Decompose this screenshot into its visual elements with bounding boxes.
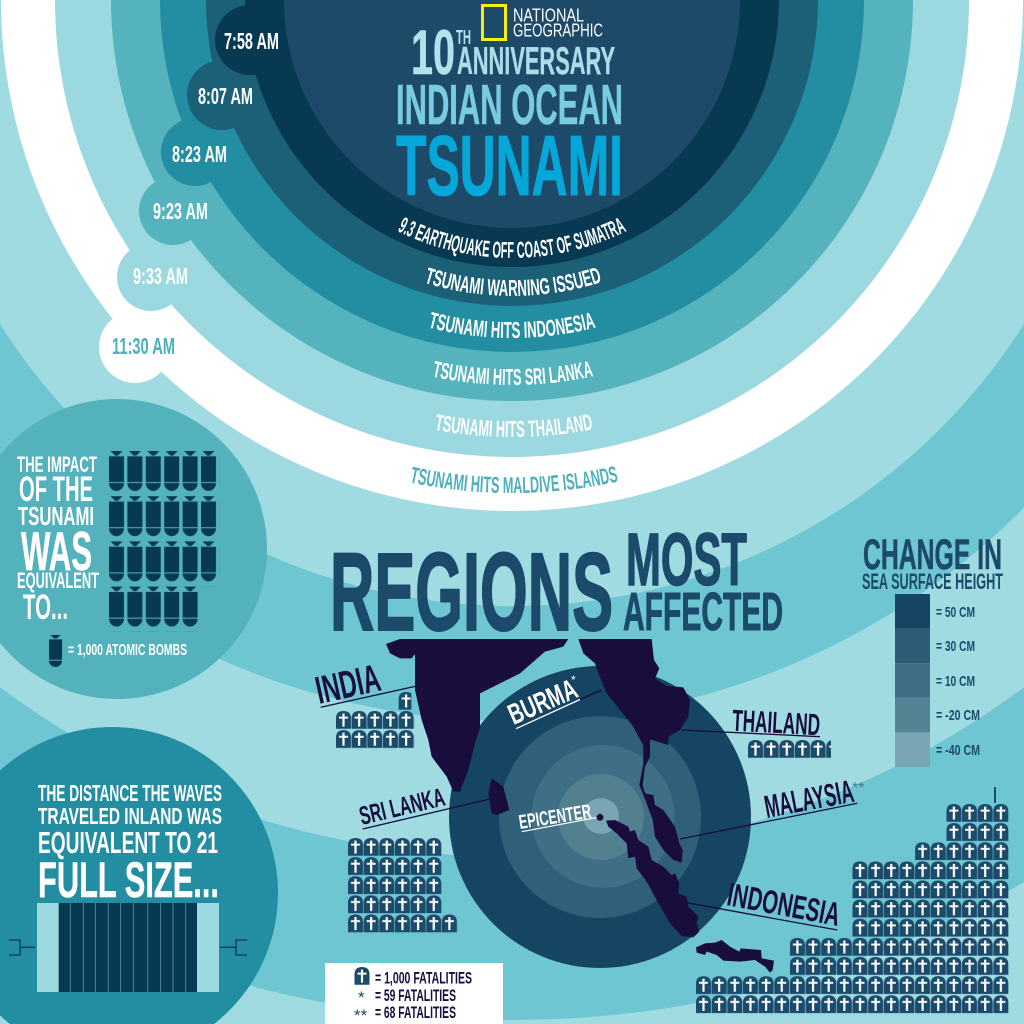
timeline times: 8:07 AM — [198, 83, 253, 109]
legend values: = 50 CM — [936, 604, 975, 621]
label: india: INDIA — [312, 657, 384, 713]
timeline events: TSUNAMI HITS MALDIVE ISLANDS — [412, 466, 618, 494]
legend tombstone icon — [354, 967, 370, 985]
impact text: TSUNAMI — [18, 501, 94, 531]
timeline times: 9:33 AM — [133, 263, 188, 289]
panel: tsunami timeline rings — [1, 0, 1023, 511]
logo: National Geographic — [482, 6, 603, 42]
timeline events — [398, 218, 627, 494]
legend text: = 1,000 FATALITIES — [375, 968, 472, 988]
legend text: = 59 FATALITIES — [375, 986, 456, 1005]
legend heading — [862, 531, 1003, 594]
label: indonesia — [687, 876, 843, 933]
legend: fatalities — [325, 963, 503, 1024]
legend: atomic bombs: = 1,000 ATOMIC BOMBS — [68, 642, 187, 659]
tombstones: india — [336, 692, 414, 749]
heading: regions most affected: AFFECTED — [623, 582, 783, 642]
timeline times: 9:23 AM — [153, 198, 208, 224]
label: indonesia: INDONESIA — [724, 876, 843, 933]
map: epicenter rings — [449, 666, 751, 968]
timeline times: 7:58 AM — [224, 28, 279, 54]
distance text: THE DISTANCE THE WAVES — [38, 780, 222, 806]
title: ANNIVERSARY — [457, 40, 615, 83]
timeline events: TSUNAMI HITS THAILAND — [436, 414, 592, 437]
label: malaysia: ** — [852, 780, 864, 797]
legend values: = -40 CM — [936, 742, 980, 759]
legend values: = 30 CM — [936, 638, 975, 655]
panel: distance circle — [0, 727, 278, 1024]
distance text: FULL SIZE... — [38, 851, 219, 908]
impact text: TO... — [23, 588, 68, 627]
tombstones: indonesia — [696, 787, 1009, 1014]
timeline events: TSUNAMI HITS SRI LANKA — [434, 361, 594, 386]
title: INDIAN OCEAN — [396, 73, 623, 136]
label: epicenter: EPICENTER — [517, 801, 593, 834]
sri lanka — [488, 778, 509, 815]
timeline times: 11:30 AM — [112, 333, 175, 359]
distance text — [38, 780, 222, 908]
timeline times — [112, 28, 279, 359]
heading: regions most affected: REGIONS — [330, 531, 613, 654]
panel: sea surface legend — [862, 531, 1003, 767]
logo: National Geographic: NATIONAL — [513, 6, 584, 26]
distance text: EQUIVALENT TO 21 — [38, 826, 218, 860]
label: epicenter — [517, 801, 604, 834]
label: burma: BURMA — [504, 673, 582, 731]
title: TSUNAMI — [396, 119, 623, 214]
icon grid: bombs — [109, 451, 219, 632]
impact text — [17, 452, 99, 627]
impact text: THE IMPACT — [17, 452, 97, 477]
label: thailand — [682, 704, 821, 742]
distance text: TRAVELED INLAND WAS — [38, 803, 222, 829]
timeline events: TSUNAMI HITS INDONESIA — [430, 312, 596, 338]
burma, thailand, malaysia — [578, 639, 690, 863]
timeline events: 9.3 EARTHQUAKE OFF COAST OF SUMATRA — [398, 218, 627, 258]
tombstones: sri lanka — [348, 838, 458, 934]
legend colour scale — [895, 594, 930, 767]
label: malaysia: MALAYSIA — [761, 773, 856, 825]
impact text: EQUIVALENT — [17, 568, 99, 593]
legend text: = 68 FATALITIES — [375, 1003, 456, 1022]
logo: National Geographic: GEOGRAPHIC — [513, 20, 603, 42]
india — [386, 639, 568, 792]
title — [396, 18, 623, 214]
map: java — [696, 940, 774, 973]
legend: atomic bombs — [49, 635, 187, 667]
panel: impact circle — [0, 399, 267, 699]
sumatra — [606, 820, 699, 937]
impact text: WAS — [21, 521, 92, 582]
label: sri lanka: SRI LANKA — [356, 782, 448, 831]
legend text — [354, 968, 472, 1024]
title: TH — [456, 27, 471, 49]
legend values: = 10 CM — [936, 673, 975, 690]
label: burma: * — [571, 673, 576, 687]
impact text: OF THE — [19, 470, 93, 509]
timeline events: TSUNAMI WARNING ISSUED — [427, 268, 600, 296]
label: malaysia — [680, 773, 864, 839]
title: 10 — [411, 18, 455, 88]
legend values — [936, 604, 980, 759]
football field — [9, 903, 247, 992]
legend text: * — [358, 988, 365, 1007]
heading: regions most affected: MOST — [626, 518, 747, 601]
legend values: = -20 CM — [936, 707, 980, 724]
timeline times: 8:23 AM — [172, 141, 227, 167]
label: thailand: THAILAND — [731, 704, 821, 742]
map: countries — [386, 639, 699, 937]
tombstones: thailand — [748, 740, 831, 759]
